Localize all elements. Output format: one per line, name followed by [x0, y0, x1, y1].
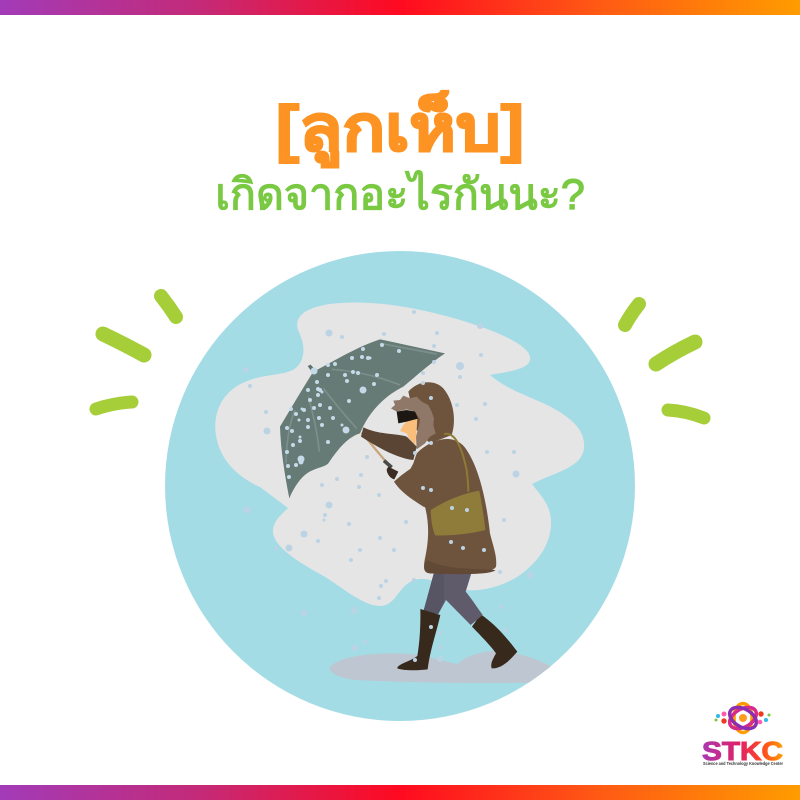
umbrella handle — [362, 433, 385, 461]
right emphasis strokes — [625, 304, 704, 418]
logo wordmark: STKC — [702, 736, 783, 766]
grey snowstorm cloud — [215, 302, 584, 606]
puddle shadow — [330, 651, 560, 683]
left emphasis strokes — [96, 296, 176, 409]
person with umbrella — [280, 339, 517, 670]
fur trim — [391, 396, 436, 449]
blue circle background — [165, 251, 635, 721]
front boot — [397, 609, 440, 670]
hood — [408, 382, 454, 443]
back boot — [472, 614, 517, 668]
title: [ลูกเห็บ] — [276, 94, 524, 164]
STKC logo — [702, 703, 783, 766]
glove — [387, 467, 398, 479]
coat body — [400, 439, 496, 574]
face — [400, 419, 417, 445]
falling snow dots — [243, 310, 533, 662]
shoulder bag — [431, 434, 485, 535]
logo atom mark — [714, 703, 770, 733]
top gradient bar — [0, 0, 800, 15]
snow on umbrella — [285, 343, 401, 479]
hair band — [397, 410, 418, 423]
legs — [423, 573, 483, 625]
illustration — [90, 251, 783, 766]
subtitle: เกิดจากอะไรกันนะ? — [215, 171, 585, 219]
logo caption: Science and Technology Knowledge Center — [703, 761, 783, 766]
umbrella canopy — [280, 339, 445, 498]
bottom gradient bar — [0, 785, 800, 800]
